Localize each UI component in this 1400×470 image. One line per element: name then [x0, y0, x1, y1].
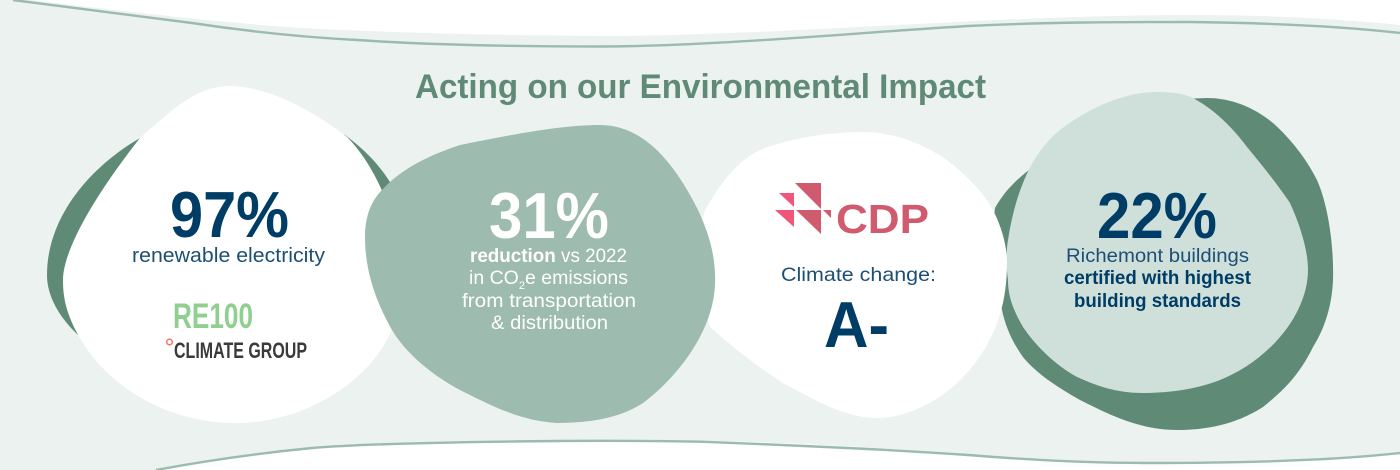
panel: transport emissions	[365, 125, 715, 423]
stat description: 2	[519, 280, 525, 292]
stat description: certified with highest	[1064, 267, 1251, 289]
heading: Acting on our Environmental Impact	[415, 68, 986, 106]
score: A-: A-	[824, 288, 889, 361]
stat description: from transportation	[462, 290, 636, 312]
stat: 97%: 97%	[170, 178, 289, 251]
panel: CDP climate score	[690, 132, 1007, 418]
panel: building standards	[990, 92, 1333, 430]
blob: white	[690, 132, 1007, 418]
stat: 22%: 22%	[1097, 179, 1217, 252]
stat description: Richemont buildings	[1066, 245, 1249, 267]
top wave line	[13, 0, 1400, 46]
logo: CDP	[775, 183, 929, 242]
blob: dark green backing	[990, 98, 1333, 430]
blob: mid green	[365, 125, 715, 423]
panel: renewable electricity	[47, 86, 400, 423]
blob: white	[63, 86, 400, 423]
stat: 31%: 31%	[489, 179, 609, 252]
stat description: e emissions	[525, 267, 628, 289]
blob: dark green backing	[47, 100, 393, 335]
stat label: renewable electricity	[132, 245, 325, 267]
logo: CDP: CDP	[836, 196, 929, 242]
stat description	[462, 245, 636, 334]
label: climate change: Climate change:	[781, 264, 936, 286]
logo: RE100: RE100	[173, 297, 253, 336]
stat description: in CO	[469, 267, 519, 289]
stat description: reduction vs 2022	[470, 245, 627, 267]
bottom wave line	[156, 441, 1400, 470]
logo: Climate Group	[167, 338, 307, 363]
stat description: & distribution	[491, 312, 608, 334]
stat description: building standards	[1074, 290, 1241, 312]
blob: pale green	[1006, 92, 1308, 393]
logo: Climate Group: CLIMATE GROUP	[174, 338, 307, 363]
stat description	[1064, 245, 1251, 312]
